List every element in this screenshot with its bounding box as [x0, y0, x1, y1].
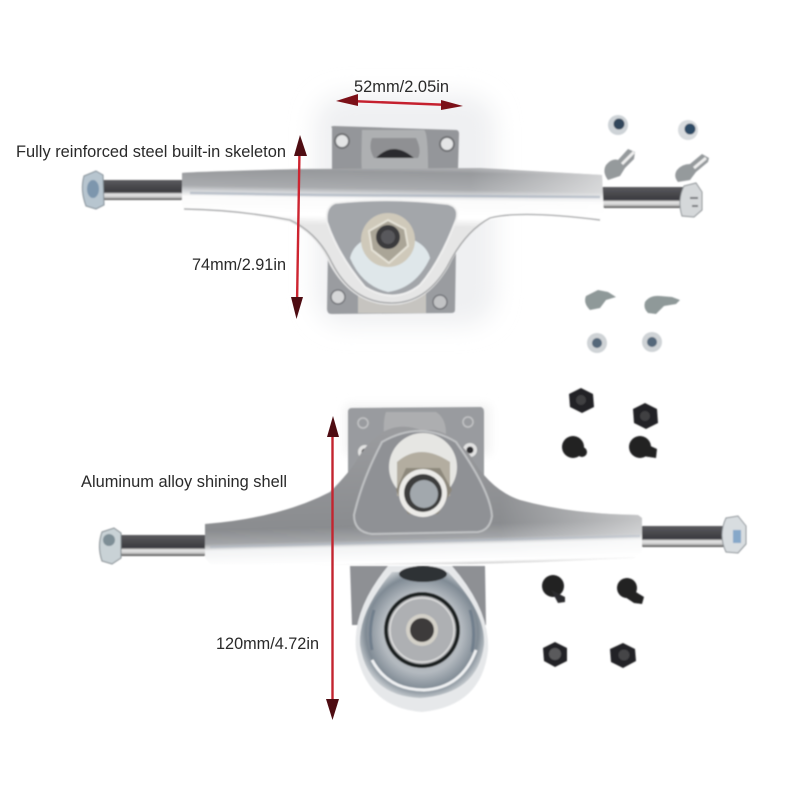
top truck axle right	[602, 183, 702, 217]
black nut 2	[633, 403, 658, 429]
label: 52mm width: 52mm/2.05in	[354, 78, 449, 96]
bottom truck lower baseplate and cup	[350, 566, 488, 712]
black bolt 1	[562, 436, 587, 458]
silver nut 1	[608, 115, 628, 135]
top truck hollow	[327, 200, 457, 296]
top truck axle left	[82, 171, 184, 209]
black bolt 2	[629, 436, 657, 458]
bottom truck hollow	[354, 431, 492, 534]
bottom truck axle right	[640, 516, 746, 553]
silver bolt 4	[644, 296, 680, 314]
silver nut 3	[587, 333, 607, 353]
silver nut 2	[678, 120, 698, 140]
black bolt 3	[542, 575, 565, 603]
top truck	[82, 126, 702, 314]
arrow: 120mm height	[326, 416, 339, 720]
black bolt 4	[617, 578, 644, 604]
bottom truck hanger	[205, 427, 642, 565]
black nut 3	[543, 642, 567, 667]
label: 74mm height: 74mm/2.91in	[192, 256, 286, 274]
arrow: 52mm width	[336, 94, 463, 110]
hardware: black nuts and bolts	[542, 388, 658, 668]
black nut 4	[610, 643, 636, 668]
top truck baseplate	[327, 126, 459, 314]
soft photo shadow behind bottom truck	[345, 405, 490, 455]
label: aluminum shell: Aluminum alloy shining shell	[81, 473, 287, 491]
label: 120mm height: 120mm/4.72in	[216, 635, 319, 653]
silver bolt 1	[604, 149, 635, 180]
silver bolt 2	[675, 154, 709, 182]
arrow: 74mm height	[291, 135, 307, 319]
label: reinforced skeleton: Fully reinforced steel built-in skeleton	[16, 143, 286, 161]
top truck hanger	[182, 168, 604, 305]
bottom truck axle left	[100, 528, 208, 564]
black nut 1	[569, 388, 594, 413]
silver nut 4	[642, 332, 662, 352]
bottom truck	[100, 407, 746, 712]
bottom truck baseplate	[348, 407, 484, 480]
silver bolt 3	[585, 290, 616, 310]
soft photo shadow behind top truck	[315, 95, 495, 325]
hardware: silver nuts and bolts	[585, 115, 709, 353]
